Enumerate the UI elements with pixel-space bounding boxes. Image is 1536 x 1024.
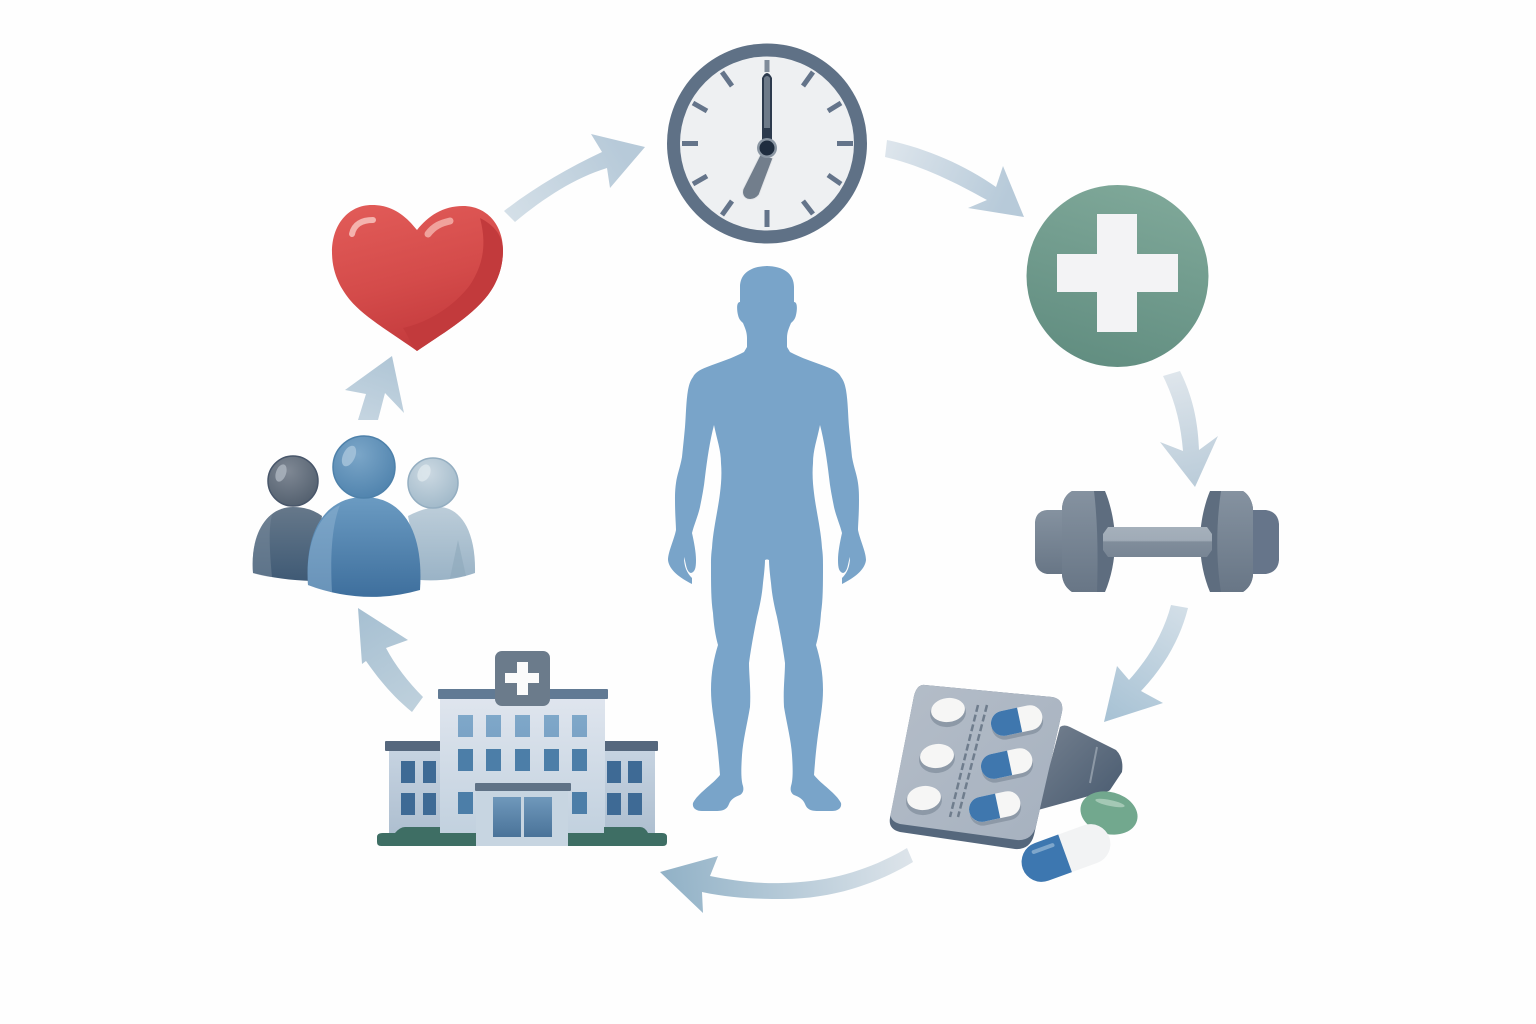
person: left <box>253 456 322 581</box>
icon: group of people <box>253 436 475 597</box>
arrow: heart to clock <box>504 134 645 222</box>
minute hand <box>762 73 772 142</box>
lawns <box>377 827 667 846</box>
right plates <box>1252 510 1279 574</box>
hour hand <box>742 155 773 200</box>
central human silhouette <box>668 266 866 811</box>
icon: clock <box>667 44 867 244</box>
icon: medication <box>890 685 1142 888</box>
icon: heart <box>332 205 503 351</box>
large capsule <box>1016 818 1116 888</box>
entrance <box>475 783 571 846</box>
blister capsules <box>967 703 1046 828</box>
arrow: pills to hospital <box>660 848 913 913</box>
arrow: hospital to people <box>358 608 423 712</box>
person: centre <box>308 436 420 597</box>
main building <box>440 698 605 846</box>
green pill <box>1076 785 1142 841</box>
icon: dumbbell <box>1035 491 1279 592</box>
icon: hospital <box>377 651 667 846</box>
body: left half <box>668 266 768 811</box>
roof sign <box>495 651 550 706</box>
right wing <box>603 750 655 834</box>
left wing <box>389 750 442 834</box>
arrow: dumbbell to pills <box>1104 605 1188 722</box>
icon: green medical cross <box>1026 185 1208 367</box>
blister pack <box>890 685 1062 849</box>
arrow: people to heart <box>345 356 404 420</box>
body: right half <box>766 266 866 811</box>
person: right <box>408 458 475 580</box>
arrow: plus to dumbbell <box>1160 371 1218 487</box>
left plates <box>1035 510 1066 574</box>
windows <box>458 715 587 737</box>
arrow: clock to plus <box>885 140 1024 217</box>
bar <box>1103 527 1212 557</box>
pill case <box>1038 726 1122 810</box>
